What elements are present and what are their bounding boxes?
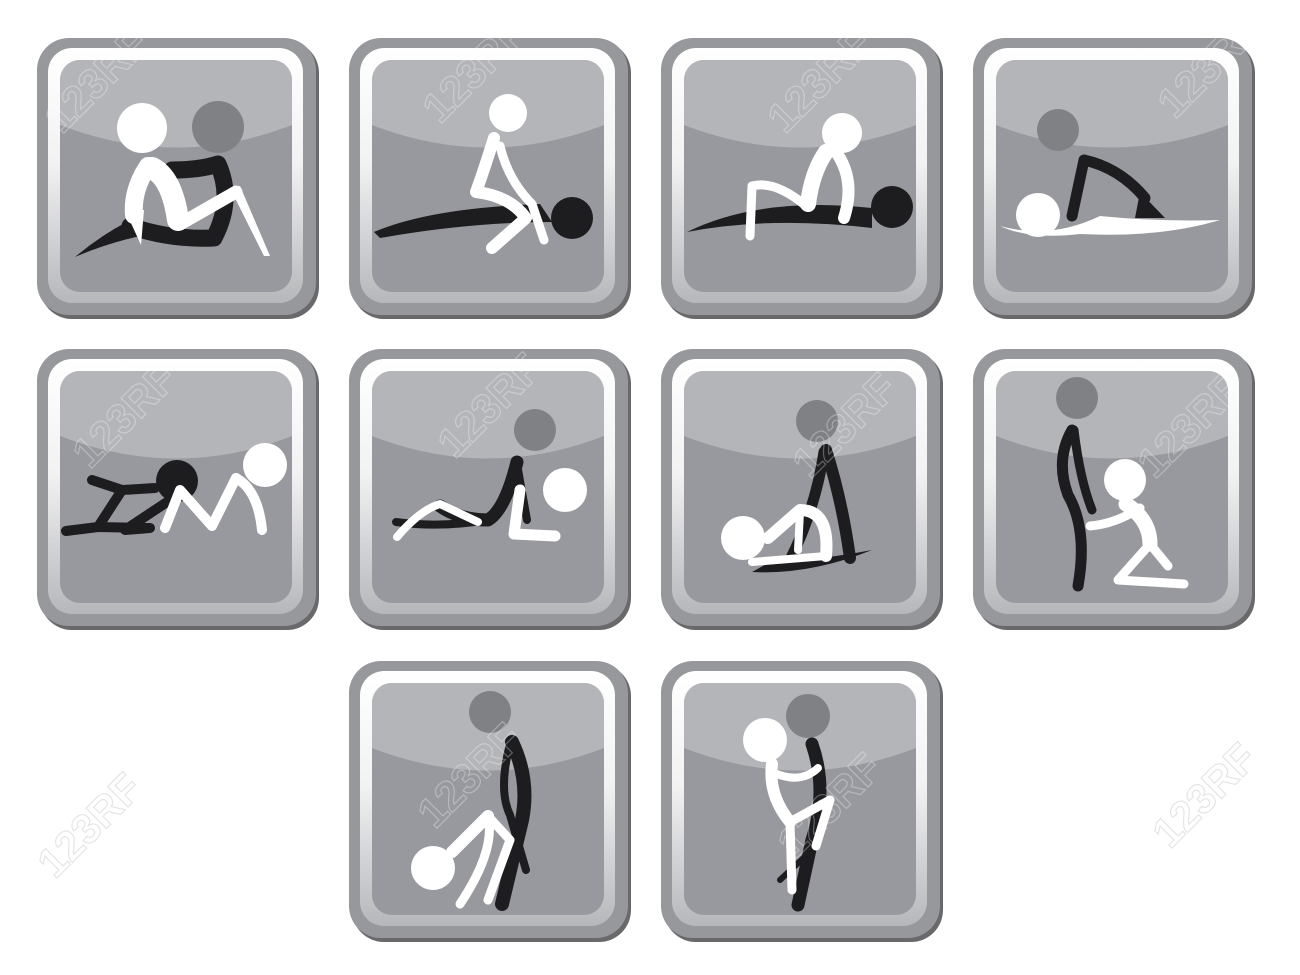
watermarks: 123RF <box>35 19 158 141</box>
icon button 8: standing and crouching pair <box>973 349 1255 630</box>
watermarks: 123RF <box>1148 4 1271 126</box>
watermarks: 123RF <box>1143 734 1266 856</box>
watermarks: 123RF <box>63 354 186 476</box>
icon button 10: standing pair, figure carried <box>661 661 943 942</box>
watermarks: 123RF <box>783 364 906 486</box>
watermarks: 123RF <box>408 714 531 836</box>
watermarks: 123RF <box>1128 364 1251 486</box>
icon button 1: seated pair <box>37 38 319 319</box>
icon button 6: pair, reclining and kneeling <box>349 349 631 630</box>
watermarks: 123RF <box>413 9 536 131</box>
icon button 3: pair, figure kneeling <box>661 38 943 319</box>
icon button 5: pair, both on all fours <box>37 349 319 630</box>
watermarks: 123RF <box>28 764 151 886</box>
icon button 4: pair, figure leaning <box>973 38 1255 319</box>
icon button 2: pair, figure above <box>349 38 631 319</box>
icon button 7: standing and kneeling pair <box>661 349 943 630</box>
icon button 9: standing and bent pair <box>349 661 631 942</box>
watermarks: 123RF <box>768 744 891 866</box>
watermarks: 123RF <box>428 344 551 466</box>
watermarks: 123RF <box>758 19 881 141</box>
